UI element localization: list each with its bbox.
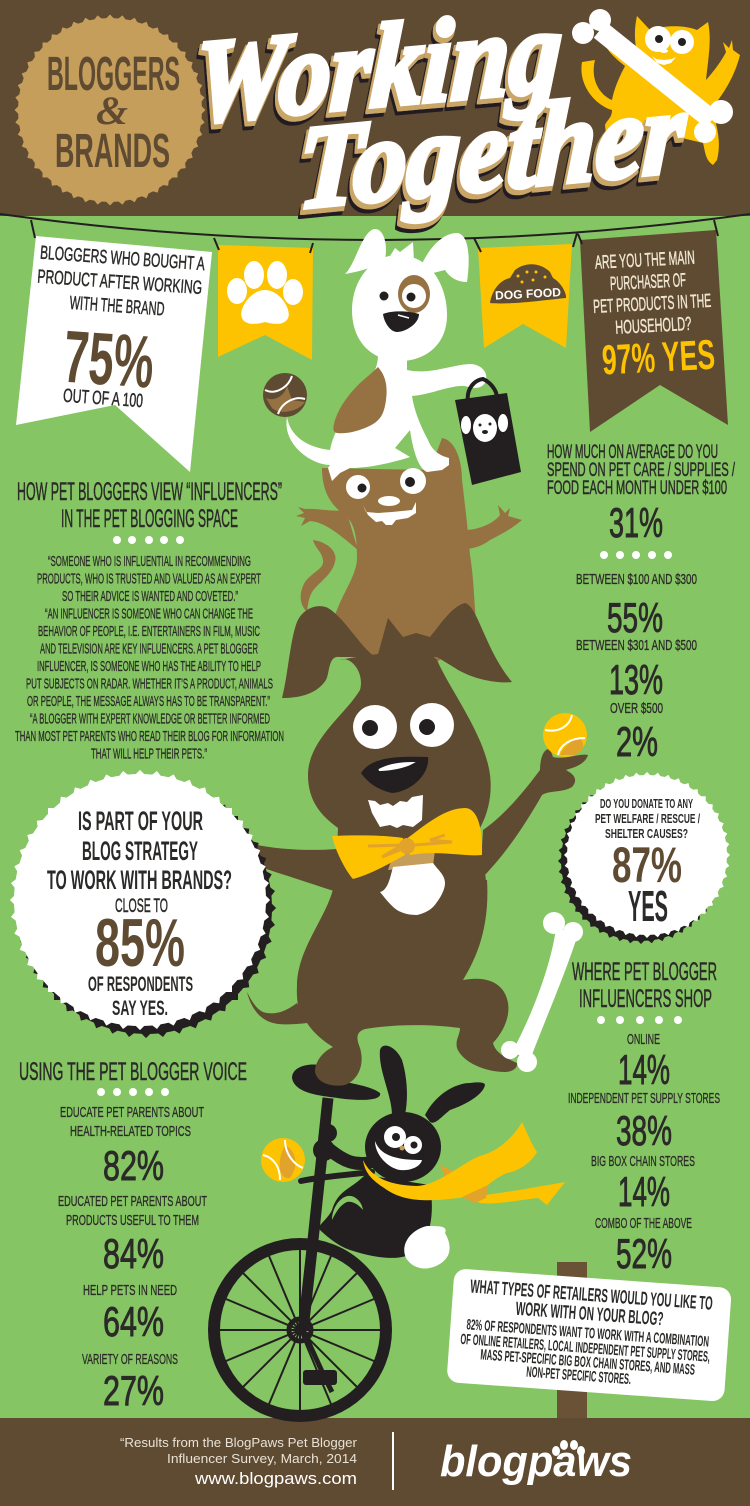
- banner: bought a product: OUT OF A 100: [62, 386, 144, 412]
- banner: paw: [214, 238, 313, 360]
- rosette: donate: 87%: [612, 837, 682, 893]
- block: where influencers shop: 52%: [616, 1230, 672, 1277]
- block: where influencers shop: ONLINE: [627, 1031, 660, 1048]
- icon: yellow cat holding bone: [572, 9, 740, 165]
- block: using the pet blogger voice: USING THE PET BLOGGER VOICE: [19, 1058, 247, 1086]
- badge: bloggers and brands: [15, 15, 205, 205]
- footer: source text: www.blogpaws.com: [194, 1469, 357, 1488]
- block: using the pet blogger voice: VARIETY OF REASONS: [82, 1351, 178, 1368]
- block: using the pet blogger voice: 82%: [103, 1142, 164, 1189]
- icon: brown tennis ball: [263, 373, 307, 417]
- text: HOW PET BLOGGERS VIEW “INFLUENCERS”: [17, 478, 282, 506]
- banner: main purchaser: HOUSEHOLD?: [615, 314, 692, 339]
- icon: white paw: [227, 261, 303, 324]
- icon: white bone: [501, 912, 583, 1072]
- block: influencers definition: PUT SUBJECTS ON RADAR. WHETHER IT’S A PRODUCT, ANIMALS: [26, 676, 273, 692]
- rosette: blog strategy: 85%: [95, 905, 185, 981]
- sign: retailers: NON-PET SPECIFIC STORES.: [526, 1364, 632, 1388]
- dots: [597, 1016, 682, 1024]
- block: where influencers shop: 14%: [618, 1046, 670, 1093]
- block: monthly spend: 31%: [609, 499, 663, 546]
- illustration: big brown dog: [247, 603, 588, 1086]
- yellow scarf: [363, 1122, 565, 1205]
- banner: bought a product: 75%: [61, 315, 157, 404]
- block: monthly spend: 13%: [609, 656, 663, 703]
- block: using the pet blogger voice: [19, 1058, 247, 1414]
- banner: bought a product: WITH THE BRAND: [69, 293, 165, 320]
- dots: [600, 551, 672, 559]
- block: monthly spend: 55%: [607, 594, 663, 641]
- block: influencers definition: SO THEIR ADVICE IS WANTED AND COVETED.”: [62, 588, 238, 605]
- banner: bought a product: BLOGGERS WHO BOUGHT A: [39, 243, 206, 275]
- bunting string: [0, 214, 750, 240]
- block: monthly spend: OVER $500: [610, 700, 663, 717]
- block: where influencers shop: [568, 958, 720, 1277]
- block: using the pet blogger voice: PRODUCTS USEFUL TO THEM: [66, 1212, 199, 1229]
- block: where influencers shop: 38%: [616, 1107, 672, 1154]
- logo: blogpaws: blogpaws: [440, 1437, 632, 1486]
- rosette: donate: SHELTER CAUSES?: [605, 826, 688, 841]
- rosette: donate: [558, 772, 730, 944]
- badge: bloggers and brands: BLOGGERS: [47, 48, 180, 101]
- block: influencers definition: AND TELEVISION ARE KEY INFLUENCERS. A PET BLOGGER: [40, 640, 258, 658]
- icon: yellow tennis ball: [543, 713, 587, 757]
- rosette: blog strategy: [10, 770, 276, 1038]
- block: influencers definition: THAT WILL HELP THEIR PETS.”: [91, 746, 207, 762]
- icon: yellow bow tie: [332, 808, 482, 879]
- title: [192, 0, 690, 234]
- block: using the pet blogger voice: EDUCATED PET PARENTS ABOUT: [58, 1193, 207, 1210]
- block: influencers definition: PRODUCTS, WHO IS TRUSTED AND VALUED AS AN EXPERT: [37, 570, 261, 588]
- rosette: blog strategy: IS PART OF YOUR: [78, 806, 203, 836]
- banner: bought a product: PRODUCT AFTER WORKING: [37, 267, 203, 299]
- block: monthly spend: 2%: [616, 718, 658, 765]
- illustration: brown cat: [296, 438, 522, 662]
- rosette: blog strategy: OF RESPONDENTS: [88, 973, 193, 996]
- block: using the pet blogger voice: EDUCATE PET PARENTS ABOUT: [60, 1104, 204, 1121]
- dots: [113, 536, 184, 544]
- badge: bloggers and brands: BRANDS: [55, 125, 170, 178]
- banner: dog food: [474, 233, 577, 348]
- block: influencers definition: “A BLOGGER WITH EXPERT KNOWLEDGE OR BETTER INFORMED: [30, 710, 270, 728]
- banner: main purchaser: [578, 220, 728, 432]
- block: using the pet blogger voice: 84%: [103, 1230, 164, 1277]
- block: influencers definition: “SOMEONE WHO IS INFLUENTIAL IN RECOMMENDING: [48, 553, 251, 570]
- block: using the pet blogger voice: HEALTH-RELATED TOPICS: [70, 1123, 191, 1140]
- block: influencers definition: [15, 478, 284, 762]
- title: Together: [296, 64, 690, 234]
- block: influencers definition: OR PEOPLE, THE MESSAGE ALWAYS HAS TO BE TRANSPARENT.”: [27, 693, 270, 710]
- footer: source text: “Results from the BlogPaws Pet Blogger: [120, 1436, 357, 1450]
- rosette: blog strategy: TO WORK WITH BRANDS?: [47, 865, 232, 895]
- bunny head and ears: [380, 1046, 407, 1115]
- block: where influencers shop: 14%: [618, 1168, 670, 1215]
- block: influencers definition: IN THE PET BLOGGING SPACE: [61, 505, 238, 533]
- rosette: blog strategy: SAY YES.: [112, 997, 168, 1020]
- block: monthly spend: [547, 442, 735, 765]
- block: using the pet blogger voice: 27%: [103, 1367, 164, 1414]
- icon: dog food bowl: DOG FOOD: [495, 285, 562, 303]
- icon: black shopping bag: [455, 379, 521, 485]
- badge: bloggers and brands: &: [96, 88, 128, 133]
- green background: [0, 216, 750, 1418]
- sign: retailers: [446, 1262, 732, 1418]
- block: using the pet blogger voice: 64%: [103, 1298, 164, 1345]
- header band: [0, 0, 750, 216]
- block: influencers definition: “AN INFLUENCER IS SOMEONE WHO CAN CHANGE THE: [45, 606, 253, 622]
- block: influencers definition: THAN MOST PET PARENTS WHO READ THEIR BLOG FOR INFORMATION: [15, 728, 284, 745]
- unicycle: [214, 1098, 386, 1416]
- illustration: bunny on unicycle: [214, 1046, 565, 1416]
- footer: source text: [120, 1436, 357, 1488]
- rosette: blog strategy: CLOSE TO: [115, 896, 168, 917]
- banner: bought a product: [16, 220, 212, 472]
- block: using the pet blogger voice: HELP PETS IN NEED: [83, 1282, 177, 1299]
- block: influencers definition: BEHAVIOR OF PEOPLE, I.E. ENTERTAINERS IN FILM, MUSIC: [38, 623, 260, 640]
- illustration: white dog: [286, 229, 486, 481]
- bunny body: [318, 1175, 432, 1258]
- block: influencers definition: INFLUENCER, IS SOMEONE WHO HAS THE ABILITY TO HELP: [37, 658, 261, 675]
- footer: source text: Influencer Survey, March, 2014: [167, 1452, 357, 1466]
- rosette: blog strategy: BLOG STRATEGY: [82, 836, 198, 866]
- rosette: donate: YES: [628, 882, 668, 931]
- dots: [97, 1088, 169, 1096]
- footer band: [0, 1418, 750, 1506]
